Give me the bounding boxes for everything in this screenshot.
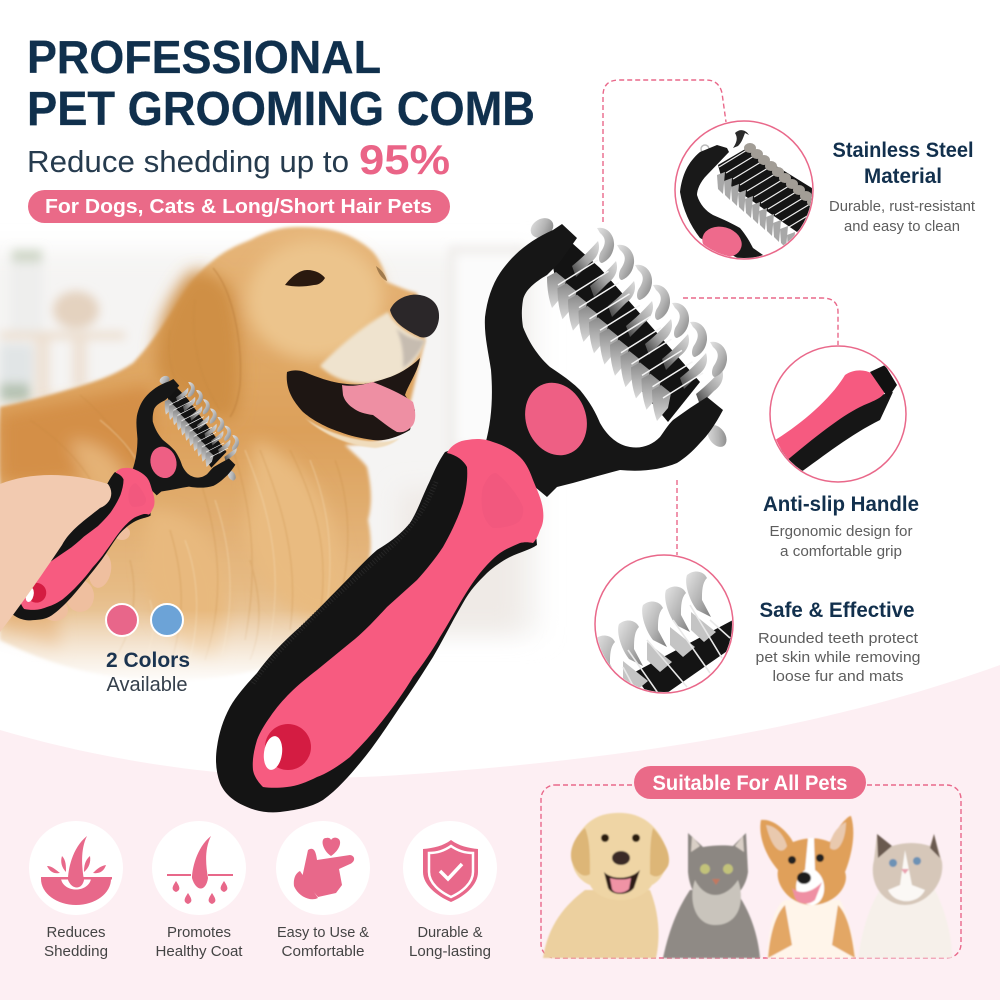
subtitle: Reduce shedding up to (27, 144, 349, 179)
dog body (0, 227, 425, 680)
teeth close-up band (633, 620, 733, 693)
icon: hair follicle with skin (41, 836, 112, 905)
audience pill: For Dogs, Cats & Long/Short Hair Pets (45, 196, 432, 218)
dog muzzle (320, 312, 425, 384)
c1 teeth (717, 143, 812, 246)
c1 hook (733, 130, 749, 148)
safe and effective text (756, 599, 920, 685)
callout: handle circle (776, 366, 897, 471)
dog fur shading (0, 240, 383, 660)
small comb in hand (0, 362, 246, 637)
callout: stainless steel connector (603, 80, 726, 222)
teeth close-up blades (623, 612, 716, 691)
stainless steel text: Material (864, 165, 942, 188)
dog eye (285, 270, 325, 286)
callout ring 1 (675, 121, 813, 259)
colour swatches (106, 604, 183, 636)
colours label: 2 Colors (106, 649, 190, 672)
safe and effective text: pet skin while removing (756, 649, 920, 666)
benefit: reduces shedding (29, 821, 123, 960)
benefit: reduces shedding: Reduces (46, 924, 106, 941)
blue swatch (151, 604, 183, 636)
small comb (3, 362, 246, 637)
safe and effective text: loose fur and mats (772, 668, 904, 685)
dog light fur strands (100, 420, 330, 670)
suitable pets pill (634, 766, 866, 799)
dog ear edge (213, 268, 240, 417)
benefit: durable (403, 821, 497, 960)
teeth close-up wires (623, 605, 730, 693)
suitable pets pill: Suitable For All Pets (652, 772, 848, 795)
pink swatch (106, 604, 138, 636)
suitable pets frame (541, 785, 961, 958)
benefit: easy to use: Comfortable (282, 943, 364, 960)
stainless steel text (829, 139, 976, 235)
anti-slip text: Ergonomic design for (770, 523, 912, 540)
title (27, 31, 535, 136)
benefit: reduces shedding: Shedding (44, 943, 108, 960)
pet: corgi (760, 816, 856, 958)
dog brow mark (376, 266, 387, 281)
benefit: easy to use (276, 821, 370, 960)
handle pink grip (772, 370, 885, 462)
title: PET GROOMING COMB (27, 83, 535, 136)
teeth close-up hooks (598, 572, 711, 668)
benefit: easy to use: Easy to Use & (277, 924, 369, 941)
callout: teeth connector (676, 480, 678, 555)
audience pill (28, 190, 450, 223)
icon: shield with check (423, 840, 478, 902)
benefit: durable: Durable & (418, 924, 482, 941)
benefit: healthy coat: Healthy Coat (156, 943, 243, 960)
c1 blade band (718, 148, 815, 232)
anti-slip text: Anti-slip Handle (763, 493, 919, 516)
pet: golden retriever (543, 813, 669, 958)
handle black underside (775, 392, 893, 475)
subtitle: 95% (359, 136, 450, 183)
large comb product (216, 214, 730, 812)
dog lower fade (0, 610, 400, 688)
c1 oval button (702, 226, 742, 257)
c1 ring bolt (701, 145, 709, 153)
benefit: healthy coat (152, 821, 246, 960)
pale pink lower band (0, 665, 1000, 1000)
hand fingers (42, 526, 130, 621)
benefit: durable: Long-lasting (409, 943, 491, 960)
stainless steel text: Stainless Steel (832, 139, 974, 162)
stainless steel text: and easy to clean (844, 218, 960, 235)
dog nose (390, 295, 439, 338)
pet: ragdoll cat (858, 834, 952, 958)
icon: hair follicle with drops (167, 836, 233, 904)
blurred room background (0, 250, 540, 635)
icon: finger heart hand (294, 838, 354, 899)
dog tongue (342, 382, 415, 432)
callout ring 2 (770, 346, 906, 482)
dog muzzle shadow (396, 328, 425, 368)
safe and effective text: Rounded teeth protect (758, 630, 919, 647)
title: PROFESSIONAL (27, 31, 381, 83)
dog fur strands (30, 300, 348, 665)
callout: handle connector (683, 298, 838, 345)
handle collar cap (870, 366, 897, 394)
callout ring 3 (595, 555, 733, 693)
colours label: Available (106, 674, 188, 696)
photo: golden retriever being groomed (0, 227, 439, 688)
c1 arm (680, 145, 763, 262)
anti-slip text (763, 493, 919, 560)
subtitle (27, 136, 450, 183)
callout: stainless steel circle (680, 130, 812, 258)
benefit: healthy coat: Promotes (167, 924, 231, 941)
colours label (106, 649, 190, 696)
dog chin (305, 418, 400, 448)
hand palm and thumb (0, 475, 111, 632)
pet: tabby cat (663, 833, 760, 958)
stainless steel text: Durable, rust-resistant (829, 198, 976, 215)
callout: teeth circle (598, 572, 732, 692)
safe and effective text: Safe & Effective (760, 599, 914, 622)
dog mouth (287, 358, 420, 440)
anti-slip text: a comfortable grip (780, 543, 902, 560)
